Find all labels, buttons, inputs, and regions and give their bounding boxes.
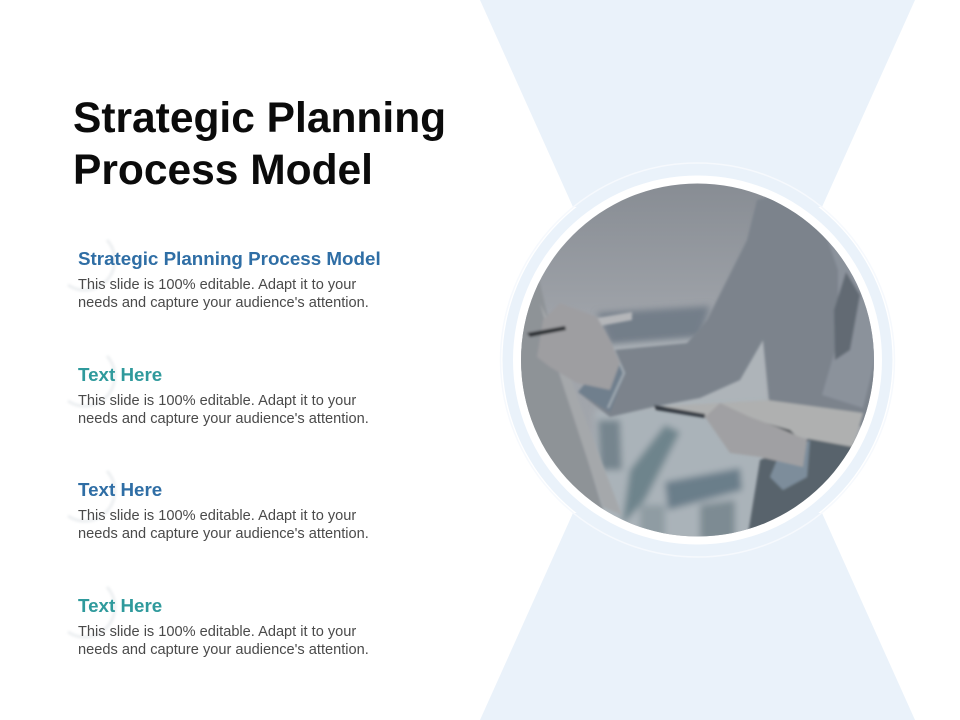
body 1 [78, 277, 369, 311]
body 4: needs and capture your audience's attention. [78, 642, 369, 658]
body 1: This slide is 100% editable. Adapt it to your [78, 277, 356, 293]
marker [527, 326, 566, 337]
board [521, 280, 604, 509]
hourglass shape: bottom [480, 513, 915, 720]
heading 4: Text Here [78, 595, 162, 616]
body 3: needs and capture your audience's attention. [78, 526, 369, 542]
body 2: This slide is 100% editable. Adapt it to your [78, 393, 356, 409]
right cuff [770, 440, 810, 490]
hourglass shape: top [480, 0, 915, 207]
clipboard [653, 400, 863, 447]
left hand [538, 318, 620, 391]
body 4: This slide is 100% editable. Adapt it to your [78, 624, 356, 640]
shirt [823, 243, 874, 407]
left cuff [580, 369, 622, 410]
body 4 [78, 624, 369, 658]
body 1: needs and capture your audience's attention. [78, 295, 369, 311]
title: Process Model [73, 147, 373, 194]
body 2: needs and capture your audience's attention. [78, 411, 369, 427]
text block 3 [78, 479, 369, 542]
body 3: This slide is 100% editable. Adapt it to your [78, 508, 356, 524]
body 2 [78, 393, 369, 427]
lower jacket [747, 438, 854, 529]
text block 4 [78, 595, 369, 658]
tie [834, 272, 860, 360]
title: Strategic Planning [73, 95, 446, 142]
faint ring line [500, 163, 894, 557]
circular photo: businessman at a whiteboard [515, 180, 880, 540]
title [73, 95, 446, 194]
white ring [513, 176, 882, 544]
text block 1 [78, 248, 381, 311]
text block 2 [78, 364, 369, 427]
heading 2: Text Here [78, 364, 162, 385]
body 3 [78, 508, 369, 542]
heading 1: Strategic Planning Process Model [78, 248, 381, 269]
pen on the horizon [597, 312, 632, 326]
background hourglass and photo circle [480, 0, 915, 720]
right hand [705, 403, 807, 467]
heading 3: Text Here [78, 479, 162, 500]
outer ring [502, 165, 892, 555]
suit body and sleeve [578, 190, 880, 430]
